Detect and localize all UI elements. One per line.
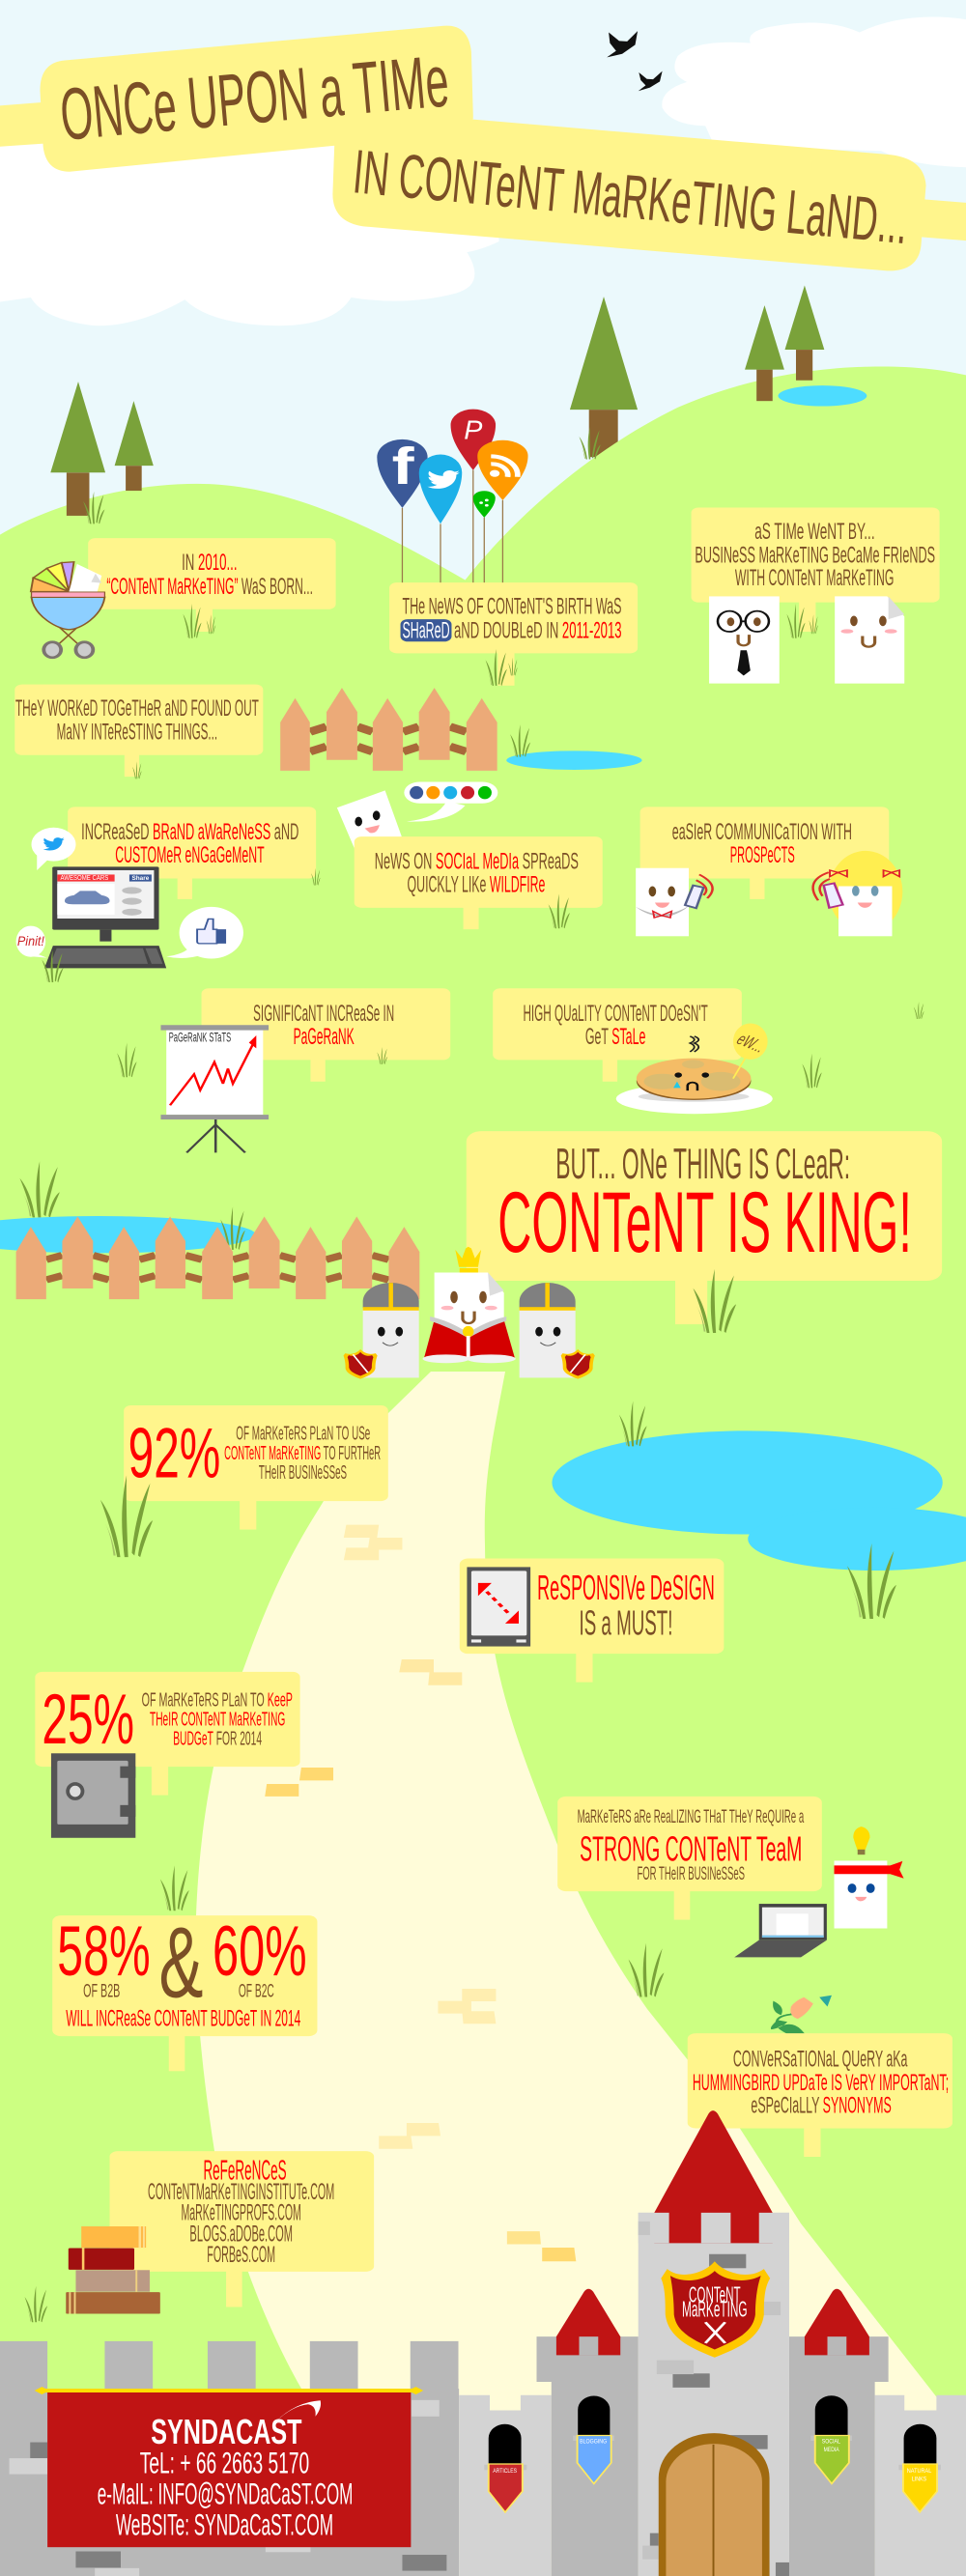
road bricks xyxy=(265,1525,496,2001)
trees on left hill xyxy=(50,382,154,516)
chart: pagerank stats board xyxy=(160,1025,269,1152)
hills xyxy=(0,366,966,690)
castle bricks xyxy=(10,2222,789,2576)
section: closing and castle: CONTeNTMaRKeTINGINSTITUTe.COM xyxy=(148,2179,334,2204)
sign: news shared: aND DOUBLeD IN 2011-2013 xyxy=(454,618,621,643)
sign: references: FORBeS.COM xyxy=(207,2241,275,2267)
sign: pagerank: PaGeRaNK xyxy=(294,1025,355,1050)
sign: references xyxy=(110,2151,374,2307)
sign: easier communication: PROSPeCTS xyxy=(730,843,795,868)
balloon: pinterest xyxy=(451,410,496,470)
window banner: natural links xyxy=(898,2424,941,2512)
sign: 58 and 60 percent: 58% xyxy=(57,1911,151,1991)
road xyxy=(195,1372,966,2576)
sign: references: BLOGS.aDOBe.COM xyxy=(189,2221,293,2247)
character: content marketing friend xyxy=(835,596,904,684)
trees and pond on right hill xyxy=(745,286,867,407)
sign: 58 and 60 percent: OF B2C xyxy=(239,1981,274,2001)
chart: pagerank stats board: PaGeRaNK STaTS xyxy=(169,1031,231,1045)
castle: outer wall left xyxy=(0,2341,459,2576)
monitor xyxy=(52,866,159,942)
title banner strips xyxy=(0,26,966,270)
section: closing and castle: MaRKeTING xyxy=(682,2296,748,2321)
sign: strong content team xyxy=(557,1797,822,1920)
section: statistics: OF MaRKeTeRS PLaN TO USe xyxy=(236,1424,370,1445)
sign: news shared xyxy=(389,582,638,686)
bubble: pin it xyxy=(16,926,46,958)
sign: pagerank xyxy=(202,988,450,1082)
section: birth and social xyxy=(31,410,940,686)
sign: easier communication xyxy=(640,807,889,899)
section: closing and castle: CONTeNT xyxy=(689,2282,741,2307)
window banner: articles xyxy=(484,2424,526,2512)
sign: references: ReFeReNCeS xyxy=(203,2155,287,2186)
window banner: articles: ARTICLES xyxy=(493,2467,517,2475)
logo: syndacast xyxy=(151,2400,321,2451)
title ribbon and signs xyxy=(0,26,966,270)
section: statistics: OF MaRKeTeRS PLaN TO KeeP xyxy=(142,1690,293,1711)
pond: small xyxy=(506,750,642,770)
balloon: rss xyxy=(477,440,528,500)
monitor: Share xyxy=(131,875,150,882)
speech bubble: ew: eW... xyxy=(732,1031,770,1056)
section: statistics xyxy=(35,1401,966,2071)
sign: 58 and 60 percent xyxy=(52,1907,317,2071)
character: business on phone xyxy=(636,868,713,936)
sign: worked together xyxy=(14,685,263,777)
fence: lower xyxy=(16,1216,419,1299)
sign: content is king xyxy=(467,1131,942,1324)
scene: clouds, trees, hills xyxy=(0,17,966,690)
fence: upper xyxy=(280,688,497,771)
roofs xyxy=(556,2110,869,2355)
sign: friends xyxy=(692,507,940,632)
window banner: social media: MEDIA xyxy=(824,2446,839,2452)
pond: large xyxy=(552,1430,966,1571)
character: content team member xyxy=(835,1826,904,1929)
character: right knight xyxy=(520,1283,595,1379)
sign: in 2010 xyxy=(88,538,336,632)
section: benefits: CUSTOMeR eNGaGeMeNT xyxy=(115,843,265,868)
bubble: pin it: Pinit! xyxy=(17,935,44,948)
castle door xyxy=(659,2433,770,2576)
sign: social media wildfire xyxy=(355,836,603,929)
tree behind right hill xyxy=(570,297,638,457)
window banner: social media: SOCIAL xyxy=(822,2437,840,2445)
sign: in 2010: IN 2010... xyxy=(182,551,238,576)
balloon: pinterest: P xyxy=(464,415,483,445)
icon: safe xyxy=(51,1753,135,1838)
section: benefits: THeY WORKeD TOGeTHeR aND FOUND OUT xyxy=(15,696,259,722)
sign: 92 percent: 92% xyxy=(128,1414,220,1493)
section: statistics: THeIR BUSINeSSeS xyxy=(259,1462,347,1484)
grass tufts: upper hills xyxy=(83,427,818,686)
contact banner: TeL: + 66 2663 5170 xyxy=(140,2446,309,2479)
sign: 25 percent xyxy=(35,1672,300,1796)
pond: left xyxy=(0,1216,256,1253)
birds xyxy=(607,31,663,91)
character: king xyxy=(423,1247,516,1363)
contact banner: SYNDACAST xyxy=(151,2413,302,2451)
keyboard xyxy=(44,946,166,968)
grass tufts: road sides xyxy=(160,1401,896,1997)
central tower xyxy=(639,2213,789,2576)
icon: computer with social bubbles xyxy=(16,828,243,968)
sign: 58 and 60 percent: OF B2B xyxy=(83,1981,120,2001)
sign: strong content team: FOR THeIR BUSINeSSeS xyxy=(637,1864,745,1884)
window banner: blogging xyxy=(573,2396,614,2483)
bubble: like xyxy=(166,907,243,959)
section: benefits: SIGNIFICaNT INCReaSe IN xyxy=(253,1002,394,1026)
contact banner xyxy=(35,2387,423,2547)
castle: keep xyxy=(459,2110,966,2576)
sign: responsive design: IS a MUST! xyxy=(579,1604,672,1643)
merlons over roofs xyxy=(639,2213,789,2243)
icon: flower and hummingbird xyxy=(771,1996,832,2039)
window banner: natural links: NATURAL xyxy=(907,2467,931,2475)
section: closing and castle: e-MaIL: INFO@SYNDaCaST.COM xyxy=(98,2477,353,2510)
sign: social media wildfire: QUICKLY LIKe WILDFIRe xyxy=(408,872,545,897)
character: prospect girl on phone xyxy=(813,851,902,936)
road bricks lower xyxy=(379,2001,576,2261)
section: statistics: THeIR CONTeNT MaRKeTING xyxy=(150,1710,285,1731)
sign: in 2010: “CONTeNT MaRKeTING” WaS BORN... xyxy=(106,575,313,600)
icon: stack of books xyxy=(66,2226,160,2314)
window banner: natural links: LINKS xyxy=(912,2476,926,2482)
icon: baby stroller xyxy=(31,562,104,658)
crown xyxy=(455,1247,481,1273)
bubble: twitter xyxy=(32,828,75,870)
section: benefits xyxy=(0,685,942,1379)
sign: 92 percent: CONTeNT MaRKeTING TO FURTHeR xyxy=(224,1443,381,1464)
sign: 25 percent: BUDGeT FOR 2014 xyxy=(173,1728,262,1749)
shield: content marketing xyxy=(661,2261,770,2358)
speech bubble: ew xyxy=(732,1023,770,1079)
window banner: social media xyxy=(810,2395,852,2483)
icon: tablet xyxy=(467,1567,530,1647)
icon: stale bread xyxy=(616,1036,773,1114)
sign: 58 and 60 percent: 60% xyxy=(213,1911,307,1991)
sign: brand awareness: INCReaSeD BRaND aWaReNeSS aND xyxy=(81,820,298,845)
side towers xyxy=(536,2336,889,2576)
monitor: AWESOME CARS xyxy=(61,874,108,882)
section: closing and castle xyxy=(0,1996,966,2576)
sign: 25 percent: 25% xyxy=(42,1680,134,1759)
sign: 58 and 60 percent: & xyxy=(159,1907,203,2019)
sign: social media wildfire: NeWS ON SOCIaL MeDIa SPReaDS xyxy=(375,849,579,874)
sign: stale content xyxy=(493,988,742,1082)
sign: brand awareness xyxy=(68,807,316,899)
balloon: share xyxy=(473,491,496,518)
cloud: large left xyxy=(0,142,499,326)
sign: stale content: GeT STaLe xyxy=(585,1025,645,1050)
castle walls right and left of towers xyxy=(459,2395,966,2576)
cloud: right xyxy=(662,17,966,167)
balloon: facebook: f xyxy=(392,437,415,495)
balloon: twitter xyxy=(419,455,462,524)
character: left knight xyxy=(344,1283,419,1379)
grass tufts: meadow xyxy=(19,724,924,1217)
lower meadow ground xyxy=(0,618,966,2576)
balloon: facebook xyxy=(377,437,428,508)
sign: 92 percent xyxy=(124,1405,388,1530)
title line 1: ONCe UPON a TIMe xyxy=(57,40,452,156)
section: benefits: MaNY INTeReSTING THINGS... xyxy=(57,720,217,745)
section: closing and castle: MaRKeTINGPROFS.COM xyxy=(182,2199,301,2225)
icon: laptop xyxy=(734,1904,827,1957)
sign: news shared: SHaReD xyxy=(402,618,450,643)
sign: responsive design xyxy=(460,1558,724,1683)
sign: hummingbird xyxy=(688,2033,952,2157)
section: closing and castle: WeBSITe: SYNDaCaST.COM xyxy=(116,2507,333,2541)
character: business marketing with glasses xyxy=(709,596,780,684)
window banner: blogging: BLOGGING xyxy=(580,2437,607,2445)
speech bubble: social colours xyxy=(404,781,497,822)
character: social media page xyxy=(337,790,402,855)
balloons xyxy=(377,410,528,583)
section: statistics: WILL INCReaSe CONTeNT BUDGeT IN 2014 xyxy=(66,2006,300,2031)
